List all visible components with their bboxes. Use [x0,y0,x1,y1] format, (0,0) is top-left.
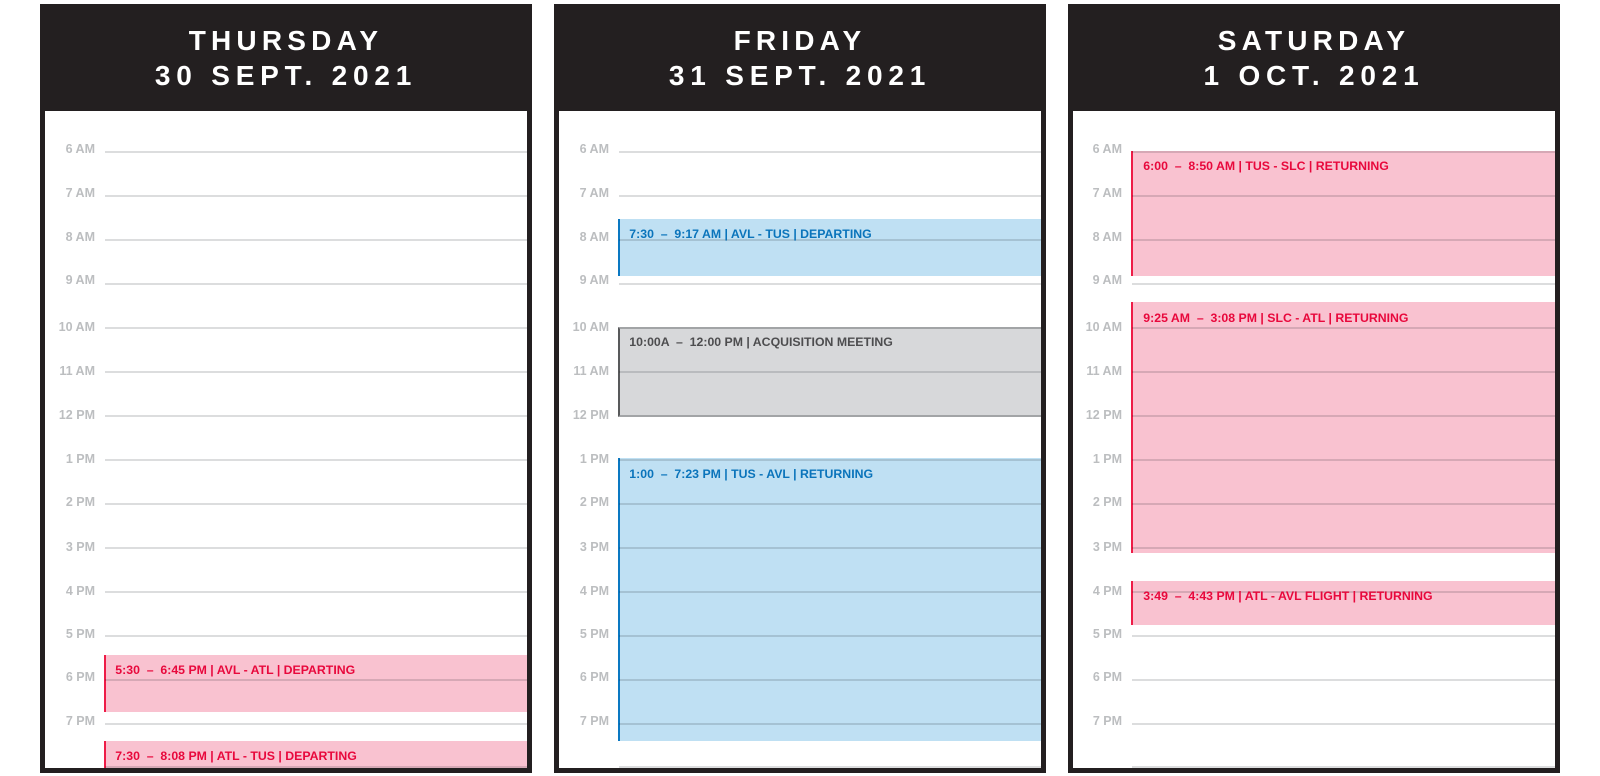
hour labels: 8 AM [66,230,95,244]
hour labels: 8 AM [580,230,609,244]
hour labels: 1 PM [66,452,95,466]
hour labels: 7 AM [66,186,95,200]
hour labels: 3 PM [580,540,609,554]
heading: Saturday date [1204,25,1424,91]
hour labels: 11 AM [1086,364,1122,378]
hour labels [59,142,95,728]
hour labels: 10 AM [59,320,95,334]
event label: TUS-SLC returning: 6:00 – 8:50 AM | TUS - SLC | RETURNING [1143,159,1389,173]
hour labels: 7 AM [1093,186,1122,200]
calendar body: Friday [559,111,1041,768]
event block: acquisition meeting [618,327,1041,417]
hour labels: 12 PM [573,408,609,422]
hour labels [573,142,609,728]
hour labels: 7 AM [580,186,609,200]
panel: Saturday [1068,4,1560,773]
hour labels: 6 AM [66,142,95,156]
hour labels: 9 AM [1093,273,1122,287]
hour labels: 6 PM [580,670,609,684]
hour labels: 7 PM [580,714,609,728]
hour labels: 11 AM [59,364,95,378]
hour labels: 7 PM [1093,714,1122,728]
hour labels [1086,142,1122,728]
heading: Saturday date: SATURDAY [1218,25,1410,56]
hour labels: 3 PM [1093,540,1122,554]
event label: acquisition meeting: 10:00A – 12:00 PM | ACQUISITION MEETING [629,335,893,349]
hour labels: 9 AM [66,273,95,287]
event block: SLC-ATL returning [1131,302,1555,553]
hour labels: 6 AM [580,142,609,156]
panel: Friday [554,4,1046,773]
hour labels: 5 PM [580,627,609,641]
hour labels: 2 PM [1093,495,1122,509]
calendar body: Thursday [45,111,527,768]
hour labels: 10 AM [573,320,609,334]
heading: Thursday date: 30 SEPT. 2021 [155,60,417,91]
event label: ATL-TUS departing: 7:30 – 8:08 PM | ATL - TUS | DEPARTING [115,749,357,763]
hour labels: 12 PM [1086,408,1122,422]
heading: Thursday date [155,25,417,91]
event block: ATL-TUS departing [104,741,527,768]
event label: SLC-ATL returning: 9:25 AM – 3:08 PM | SLC - ATL | RETURNING [1143,311,1408,325]
event block: AVL-ATL departing [104,655,527,712]
heading: Friday date [669,25,931,91]
event block: TUS-SLC returning [1131,151,1555,276]
heading: Saturday date: 1 OCT. 2021 [1204,60,1424,91]
heading: Thursday date: THURSDAY [189,25,383,56]
hour labels: 6 PM [66,670,95,684]
hour labels: 6 AM [1093,142,1122,156]
event label: ATL-AVL flight returning: 3:49 – 4:43 PM | ATL - AVL FLIGHT | RETURNING [1143,589,1433,603]
hour labels: 7 PM [66,714,95,728]
hour labels: 4 PM [66,584,95,598]
hour labels: 3 PM [66,540,95,554]
hour labels: 10 AM [1086,320,1122,334]
hour labels: 11 AM [573,364,609,378]
heading: Friday date: 31 SEPT. 2021 [669,60,931,91]
hour labels: 4 PM [580,584,609,598]
hour labels: 6 PM [1093,670,1122,684]
event block: TUS-AVL returning [618,458,1041,741]
event label: AVL-TUS departing: 7:30 – 9:17 AM | AVL - TUS | DEPARTING [629,227,872,241]
heading: Friday date: FRIDAY [734,25,866,56]
hour labels: 1 PM [1093,452,1122,466]
hour labels: 5 PM [66,627,95,641]
hour labels: 2 PM [66,495,95,509]
event label: TUS-AVL returning: 1:00 – 7:23 PM | TUS - AVL | RETURNING [629,467,873,481]
hour labels: 4 PM [1093,584,1122,598]
hour labels: 9 AM [580,273,609,287]
calendar body: Saturday [1073,111,1555,768]
hour labels: 2 PM [580,495,609,509]
hour labels: 8 AM [1093,230,1122,244]
panel: Thursday [40,4,532,773]
event block: AVL-TUS departing [618,219,1041,276]
hour labels: 5 PM [1093,627,1122,641]
hour labels: 1 PM [580,452,609,466]
event label: AVL-ATL departing: 5:30 – 6:45 PM | AVL - ATL | DEPARTING [115,663,355,677]
event block: ATL-AVL flight returning [1131,581,1555,625]
hour labels: 12 PM [59,408,95,422]
